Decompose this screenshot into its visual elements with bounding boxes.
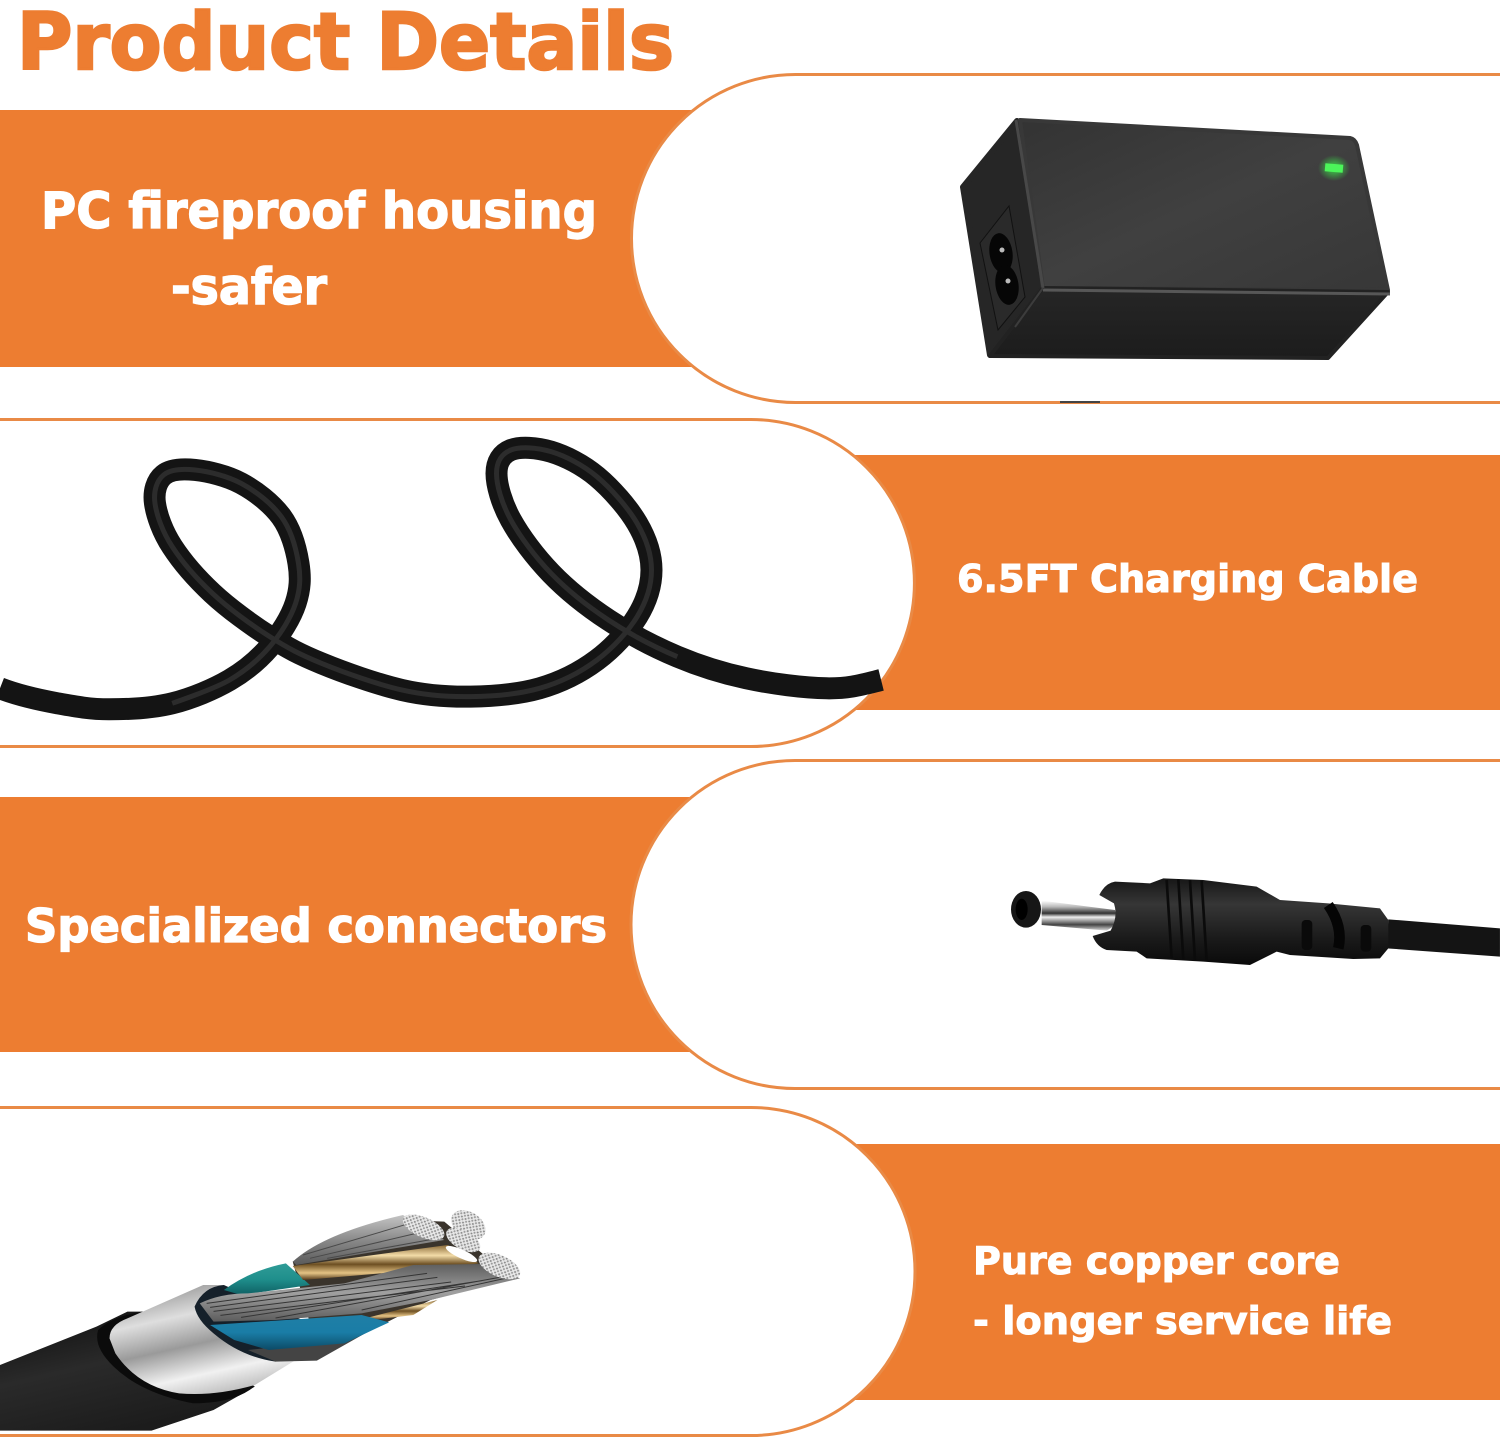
blue insulation	[210, 1315, 389, 1350]
white rounded panel 1	[632, 74, 1500, 402]
icon: green LED	[1318, 155, 1350, 181]
title: Product Details	[17, 0, 674, 88]
cut wire ends	[399, 1204, 524, 1285]
sheath inner rim	[97, 1311, 254, 1403]
barrel pin	[1042, 901, 1118, 931]
foil shield	[110, 1285, 307, 1394]
outer sheath	[0, 1312, 255, 1431]
power socket	[980, 206, 1025, 330]
feature text 4	[973, 1239, 1392, 1343]
orange band 3	[0, 797, 760, 1052]
feature text 2: 6.5FT Charging Cable	[957, 557, 1418, 601]
middle steel strand	[200, 1264, 520, 1322]
plug body	[1093, 878, 1388, 965]
gold strands	[293, 1245, 479, 1280]
icon: cable cross section	[0, 1204, 524, 1431]
pin tip ring	[1011, 891, 1041, 928]
white rounded panel 4	[0, 1108, 915, 1436]
cable coil	[0, 448, 881, 709]
strand bundle shadow	[293, 1220, 510, 1333]
feature text 3: Specialized connectors	[25, 899, 607, 953]
white rounded panel 2	[0, 420, 914, 746]
icon: power adapter brick	[963, 120, 1390, 358]
shield opening	[195, 1285, 324, 1362]
teal insulation	[224, 1263, 310, 1295]
orange band 2	[760, 455, 1500, 710]
feature text 1	[41, 182, 597, 316]
white rounded panel 3	[631, 760, 1500, 1088]
lower dark strand	[248, 1333, 365, 1362]
feature text 4: - longer service life	[973, 1299, 1392, 1343]
orange band 1	[0, 110, 760, 367]
upper silver strand	[293, 1215, 444, 1265]
panel: copper core	[0, 1108, 1500, 1436]
orange band 4	[760, 1144, 1500, 1400]
cable tail	[1387, 919, 1500, 957]
feature text 1: PC fireproof housing	[41, 182, 597, 240]
icon: DC barrel plug	[1011, 878, 1500, 965]
panel: PC fireproof housing	[0, 74, 1500, 403]
panel: charging cable	[0, 420, 1500, 746]
feature text 4: Pure copper core	[973, 1239, 1340, 1283]
feature text 1: -safer	[171, 258, 327, 316]
panel: specialized connectors	[0, 760, 1500, 1088]
